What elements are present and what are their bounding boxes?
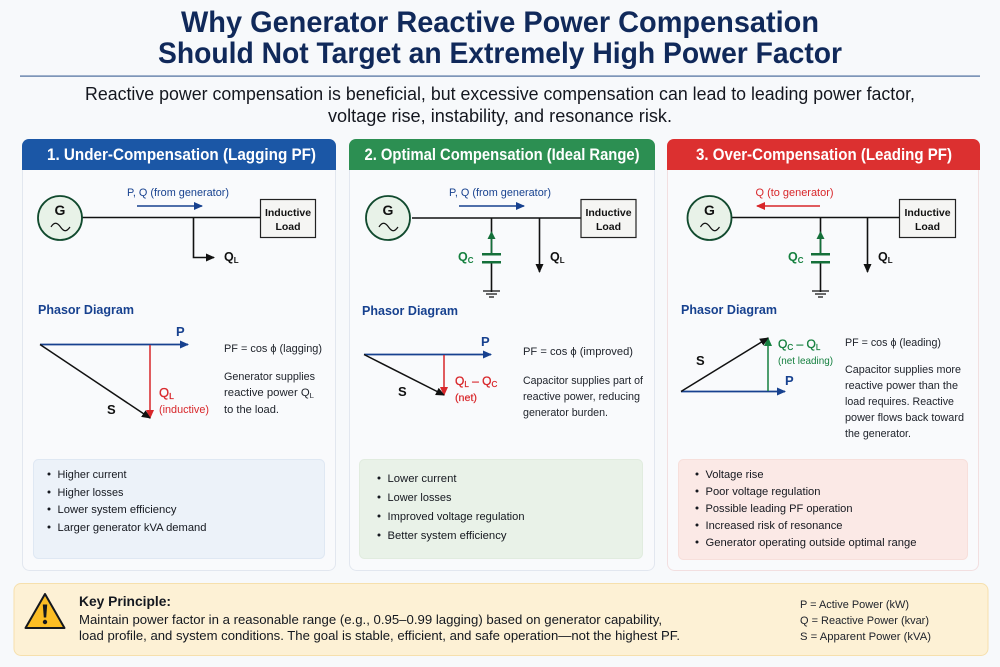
circuit diagram: optimal compensation [366, 187, 636, 297]
panel: over-compensation [667, 139, 980, 570]
phasor diagram: lagging: (inductive) [159, 404, 209, 416]
effects list: optimal compensation: Better system efficiency [388, 530, 507, 542]
effects list: optimal compensation [360, 460, 642, 558]
explanation text: to the load. [224, 404, 279, 416]
effects list: under-compensation: Higher losses [58, 487, 124, 499]
phasor diagram heading: Phasor Diagram [362, 304, 458, 318]
phasor diagram: leading: (net leading) [778, 355, 833, 367]
phasor diagram: lagging: Q [159, 385, 169, 400]
panel: under-compensation [22, 139, 336, 570]
phasor diagram: improved: (net) [455, 392, 477, 404]
explanation text: power flows back toward [845, 412, 964, 424]
callout: key principle [14, 584, 988, 656]
circuit diagram: optimal compensation: Q [458, 250, 468, 264]
title: Should Not Target an Extremely High Power Factor [158, 37, 842, 70]
phasor diagram: leading [681, 337, 833, 392]
explanation text: L [310, 391, 314, 400]
phasor diagram: lagging: P [176, 324, 185, 339]
circuit diagram: over-compensation: L [888, 256, 893, 265]
explanation text: reactive power Q [224, 387, 307, 399]
effects list: over-compensation [678, 460, 968, 560]
key principle text: Maintain power factor in a reasonable range (e.g., 0.95–0.99 lagging) based on generator capability, [79, 612, 662, 627]
explanation text: Capacitor supplies more [845, 364, 961, 376]
phasor diagram: improved: C [491, 380, 497, 389]
effects list: over-compensation: Poor voltage regulation [706, 486, 820, 498]
circuit diagram: optimal compensation: Q [550, 250, 560, 264]
title: Why Generator Reactive Power Compensation [181, 6, 819, 39]
explanation text: PF = cos ϕ (lagging) [224, 343, 322, 355]
subtitle: Reactive power compensation is beneficial, but excessive compensation can lead to leading power factor, [85, 84, 915, 104]
circuit diagram: optimal compensation: Load [596, 221, 621, 233]
phasor diagram: lagging [40, 324, 209, 418]
key principle text [79, 594, 680, 643]
circuit diagram: optimal compensation: G [383, 202, 394, 218]
legend [800, 599, 931, 643]
panel header: under-compensation: 1. Under-Compensation (Lagging PF) [47, 146, 316, 164]
phasor diagram: improved: S [398, 384, 407, 399]
effects list: over-compensation: Generator operating outside optimal range [706, 537, 916, 549]
phasor diagram: lagging: S [107, 402, 116, 417]
panel: optimal compensation [349, 139, 655, 570]
panel header: optimal compensation [349, 139, 655, 170]
circuit diagram: under-compensation: Load [275, 221, 301, 233]
subtitle [85, 84, 915, 126]
explanation text: generator burden. [523, 407, 608, 419]
circuit diagram: optimal compensation: C [468, 256, 474, 265]
circuit diagram: optimal compensation: Inductive [585, 207, 632, 219]
circuit diagram: over-compensation: G [704, 202, 715, 218]
panel header: optimal compensation: 2. Optimal Compensation (Ideal Range) [364, 146, 640, 164]
circuit diagram: under-compensation: L [234, 256, 239, 265]
phasor diagram heading: Phasor Diagram [681, 303, 777, 317]
circuit diagram: over-compensation [688, 187, 956, 297]
circuit diagram: over-compensation: C [798, 256, 804, 265]
phasor diagram: improved: L [464, 380, 469, 389]
legend: P = Active Power (kW) [800, 599, 909, 611]
circuit diagram: over-compensation: Q (to generator) [756, 187, 834, 199]
circuit diagram: over-compensation: Inductive [904, 207, 951, 219]
effects list: over-compensation: Voltage rise [706, 469, 764, 481]
circuit diagram: optimal compensation: L [560, 256, 565, 265]
legend: Q = Reactive Power (kvar) [800, 615, 929, 627]
phasor diagram: leading: Q [778, 337, 787, 351]
phasor diagram: leading: L [816, 343, 821, 352]
effects list: optimal compensation: Lower current [388, 473, 456, 485]
circuit diagram: over-compensation: Load [915, 221, 940, 233]
legend: S = Apparent Power (kVA) [800, 631, 931, 643]
circuit diagram: under-compensation: Inductive [265, 207, 311, 219]
panel header: over-compensation: 3. Over-Compensation (Leading PF) [696, 146, 952, 164]
explanation text: reactive power than the [845, 380, 958, 392]
explanation text [523, 346, 644, 419]
effects list: over-compensation: Possible leading PF operation [706, 503, 852, 515]
explanation text: PF = cos ϕ (leading) [845, 337, 941, 349]
phasor diagram: leading: P [785, 373, 794, 388]
explanation text: the generator. [845, 428, 911, 440]
panel header: under-compensation [22, 139, 336, 170]
circuit diagram: under-compensation [38, 187, 316, 265]
effects list: under-compensation: Higher current [58, 469, 126, 481]
circuit diagram: over-compensation: Q [788, 250, 798, 264]
phasor diagram: lagging: L [169, 391, 174, 401]
phasor diagram: leading: C [787, 343, 793, 352]
circuit diagram: under-compensation: P, Q (from generator) [127, 187, 229, 199]
phasor diagram heading: Phasor Diagram [38, 303, 134, 317]
effects list: under-compensation: Lower system efficiency [58, 504, 177, 516]
phasor diagram: leading: S [696, 353, 705, 368]
effects list: over-compensation: Increased risk of resonance [706, 520, 842, 532]
phasor diagram: improved [364, 334, 497, 404]
icon: warning triangle [26, 594, 64, 628]
explanation text: PF = cos ϕ (improved) [523, 346, 633, 358]
explanation text: reactive power, reducing [523, 391, 640, 403]
effects list: optimal compensation: Lower losses [388, 492, 452, 504]
panel header: over-compensation [667, 139, 980, 170]
explanation text [845, 337, 964, 440]
effects list: optimal compensation: Improved voltage regulation [388, 511, 524, 523]
phasor diagram: leading: – Q [793, 337, 816, 351]
explanation text [224, 343, 322, 416]
circuit diagram: over-compensation: Q [878, 250, 888, 264]
effects list: under-compensation [34, 460, 324, 558]
circuit diagram: under-compensation: Q [224, 250, 234, 264]
circuit diagram: under-compensation: G [55, 202, 66, 218]
circuit diagram: optimal compensation: P, Q (from generator) [449, 187, 551, 199]
key principle text: load profile, and system conditions. The goal is stable, efficient, and safe operation—not the highest PF. [79, 628, 680, 643]
phasor diagram: improved: Q [455, 374, 464, 388]
explanation text: Generator supplies [224, 371, 315, 383]
explanation text: load requires. Reactive [845, 396, 954, 408]
key principle text: Key Principle: [79, 594, 171, 609]
phasor diagram: improved: – Q [469, 374, 491, 388]
title [158, 6, 842, 70]
explanation text: Capacitor supplies part of [523, 375, 644, 387]
phasor diagram: improved: P [481, 334, 490, 349]
subtitle: voltage rise, instability, and resonance risk. [328, 106, 672, 126]
effects list: under-compensation: Larger generator kVA demand [58, 522, 206, 534]
